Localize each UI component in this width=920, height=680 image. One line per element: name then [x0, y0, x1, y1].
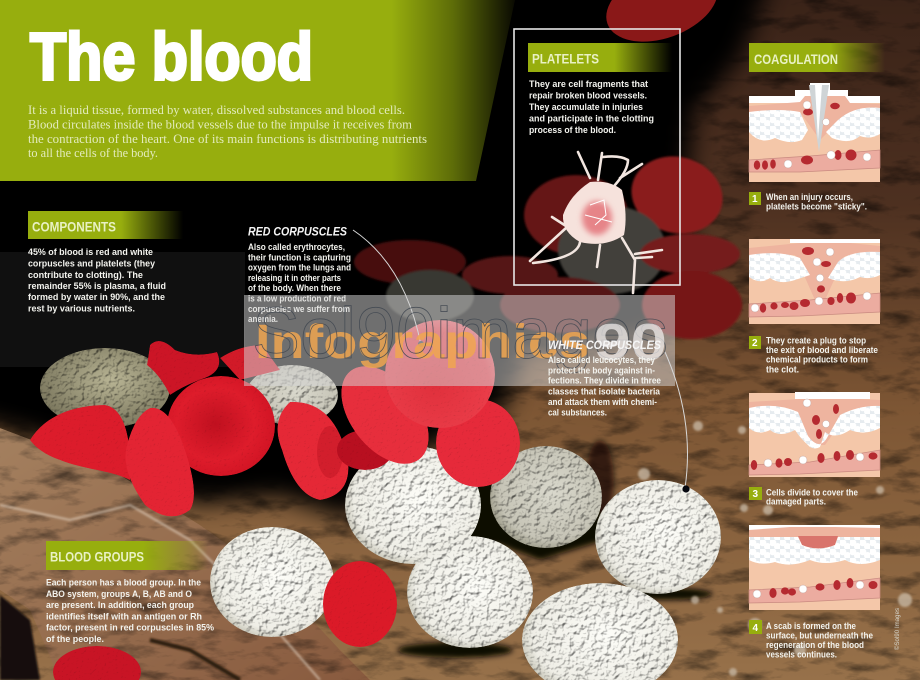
line end dots	[418, 341, 690, 493]
red corpuscles text: of the body. When there	[248, 283, 341, 293]
header band	[0, 0, 515, 181]
platelets heading	[528, 43, 672, 72]
diagram 3: cell division	[749, 392, 880, 477]
step 1: 1	[752, 194, 758, 205]
step 1	[749, 192, 867, 212]
intro text	[28, 103, 427, 160]
lower-left tissue fibre	[0, 428, 370, 680]
red corpuscles text: corpuscles we suffer from	[248, 304, 350, 314]
step 4: 4	[752, 623, 758, 634]
white corpuscles text: and attack them with chemi-	[548, 397, 657, 407]
platelets text	[529, 79, 654, 135]
diagram 4: scab	[749, 525, 880, 610]
black void above the tissue	[0, 0, 775, 520]
step 2: chemical products to form	[766, 354, 868, 364]
components text: corpuscles and platelets (they	[28, 258, 156, 268]
white corpuscles text: classes that isolate bacteria	[548, 386, 661, 396]
step 3	[749, 487, 858, 506]
watermark: 90	[594, 314, 667, 372]
red corpuscles text: Also called erythrocytes,	[248, 242, 345, 252]
panel: coagulation	[749, 43, 885, 660]
step 3: 3	[752, 489, 758, 500]
dim cells behind platelet	[354, 146, 742, 339]
white corpuscles heading: WHITE CORPUSCLES	[548, 338, 661, 352]
lines from labels	[353, 230, 688, 488]
white corpuscles text: fections. They divide in three	[548, 376, 661, 386]
white corpuscles text: protect the body against in-	[548, 366, 655, 376]
red corpuscles text: releasing it in other parts	[248, 273, 341, 283]
step 2	[749, 336, 878, 374]
components heading	[28, 211, 183, 239]
diagram 2: plug	[749, 239, 880, 324]
dim red cell top	[596, 0, 728, 56]
components text: formed by water in 90%, and the	[28, 292, 165, 302]
step 3: damaged parts.	[766, 496, 826, 506]
coagulation heading	[749, 43, 885, 72]
panel: components	[28, 211, 183, 314]
red corpuscles text	[248, 242, 351, 324]
step 1: When an injury occurs,	[766, 192, 853, 202]
white blood cells	[40, 348, 721, 680]
red blood cells	[30, 320, 520, 680]
diagram 1: injury	[749, 83, 880, 182]
step 4	[749, 620, 873, 660]
white corpuscles text: cal substances.	[548, 408, 607, 418]
red corpuscles text: anemia.	[248, 314, 278, 324]
platelets text: repair broken blood vessels.	[529, 90, 647, 100]
tissue specks	[638, 421, 912, 676]
components text: remainder 55% is plasma, a fluid	[28, 281, 166, 291]
components text: rest by various nutrients.	[28, 304, 135, 314]
intro text: to all the cells of the body.	[28, 146, 158, 160]
platelets text: They are cell fragments that	[529, 79, 648, 89]
red corpuscles text: their function is capturing	[248, 252, 351, 262]
image credit: ©Sol90 Images	[894, 608, 901, 650]
step 2: 2	[752, 338, 758, 349]
red corpuscles heading: RED CORPUSCLES	[248, 224, 347, 238]
blood groups heading	[46, 541, 208, 570]
step 4: A scab is formed on the	[766, 621, 856, 631]
components text	[28, 247, 166, 314]
step 1: platelets become "sticky".	[766, 202, 867, 212]
blood groups text: ABO system, groups A, B, AB and O	[46, 589, 192, 599]
panel: blood groups	[46, 541, 214, 644]
step 4: vessels continues.	[766, 650, 837, 660]
blood groups text: identifies itself with an antigen or Rh	[46, 612, 202, 622]
fibre seam and gaps	[0, 505, 320, 680]
panel: platelets	[514, 29, 680, 293]
blood groups text: of the people.	[46, 634, 104, 644]
components text: 45% of blood is red and white	[28, 247, 153, 257]
platelets text: process of the blood.	[529, 125, 616, 135]
red corpuscles text: oxygen from the lungs and	[248, 262, 351, 272]
frame	[514, 29, 680, 285]
platelets text: and participate in the clotting	[529, 114, 654, 124]
intro text: Blood circulates inside the blood vessels due to the impulse it receives from	[28, 118, 412, 132]
components text: contribute to clotting). The	[28, 270, 143, 280]
step 2: They create a plug to stop	[766, 336, 866, 346]
coagulation heading: COAGULATION	[754, 52, 838, 67]
intro text: It is a liquid tissue, formed by water, dissolved substances and blood cells.	[28, 103, 405, 117]
white corpuscles text: Also called leucocytes, they	[548, 355, 656, 365]
blood groups text: Each person has a blood group. In the	[46, 578, 201, 588]
blood groups text	[46, 578, 214, 644]
icon: platelet cell	[530, 152, 662, 293]
intro text: the contraction of the heart. One of its main functions is distributing nutrients	[28, 132, 427, 146]
panel: white corpuscles	[548, 338, 661, 418]
platelets heading: PLATELETS	[532, 52, 599, 66]
watermark: Sol90images	[252, 294, 668, 374]
shadows between the cells	[345, 440, 713, 658]
white corpuscles text	[548, 355, 661, 418]
blood groups text: are present. In addition, each group	[46, 600, 194, 610]
blood groups heading: BLOOD GROUPS	[50, 550, 144, 564]
red corpuscles text: is a low production of red	[248, 294, 346, 304]
step 2: the clot.	[766, 364, 799, 374]
components heading: COMPONENTS	[32, 220, 116, 234]
platelets text: They accumulate in injuries	[529, 102, 643, 112]
step 3: Cells divide to cover the	[766, 488, 858, 498]
watermark: Infographics	[255, 316, 590, 369]
step 4: regeneration of the blood	[766, 640, 864, 650]
step 4: surface, but underneath the	[766, 630, 873, 640]
title: The blood	[30, 20, 313, 94]
panel: red corpuscles	[248, 224, 351, 324]
step 2: the exit of blood and liberate	[766, 345, 878, 355]
blood groups text: factor, present in red corpuscles in 85%	[46, 622, 214, 632]
